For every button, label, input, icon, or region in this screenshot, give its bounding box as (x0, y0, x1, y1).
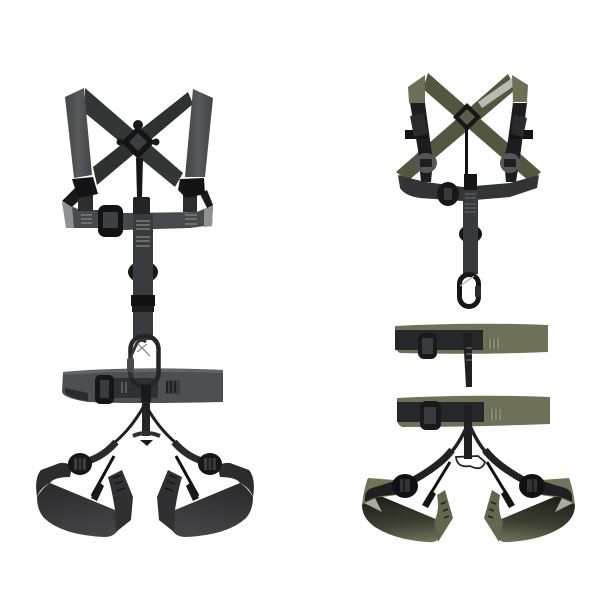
X straps (85, 88, 193, 187)
black shoulder webbing (405, 103, 533, 182)
chest buckle (98, 205, 123, 237)
carabiner and ring (127, 336, 158, 386)
reflective patch (478, 78, 514, 108)
lower olive belt with tether (397, 396, 550, 468)
shoulder buckles (62, 177, 213, 212)
grey harness (36, 88, 254, 537)
right leg loop (145, 404, 254, 537)
olive chest belt (398, 175, 539, 201)
olive central strap (459, 174, 482, 274)
chest tether (136, 158, 143, 198)
olive chest buckle (437, 182, 459, 206)
crotch tether (133, 385, 160, 446)
chest centre plate (116, 120, 160, 159)
olive shoulder tops (408, 75, 528, 103)
grey chest harness (62, 88, 213, 237)
olive chest tether (465, 126, 468, 188)
olive right leg loop (469, 424, 575, 542)
slider buckles (415, 153, 520, 173)
left leg loop (36, 404, 145, 537)
upper olive belt (395, 324, 548, 387)
olive left leg loop (362, 424, 468, 542)
chest belt (62, 202, 213, 230)
olive centre plate (453, 103, 481, 131)
olive harness (362, 73, 575, 542)
central strap with pads (128, 197, 158, 340)
shoulder straps (65, 88, 213, 178)
waist buckle (95, 375, 114, 404)
olive chest harness (396, 73, 541, 306)
olive X straps (396, 73, 541, 182)
waist belt (62, 368, 223, 403)
olive carabiner (460, 274, 481, 306)
